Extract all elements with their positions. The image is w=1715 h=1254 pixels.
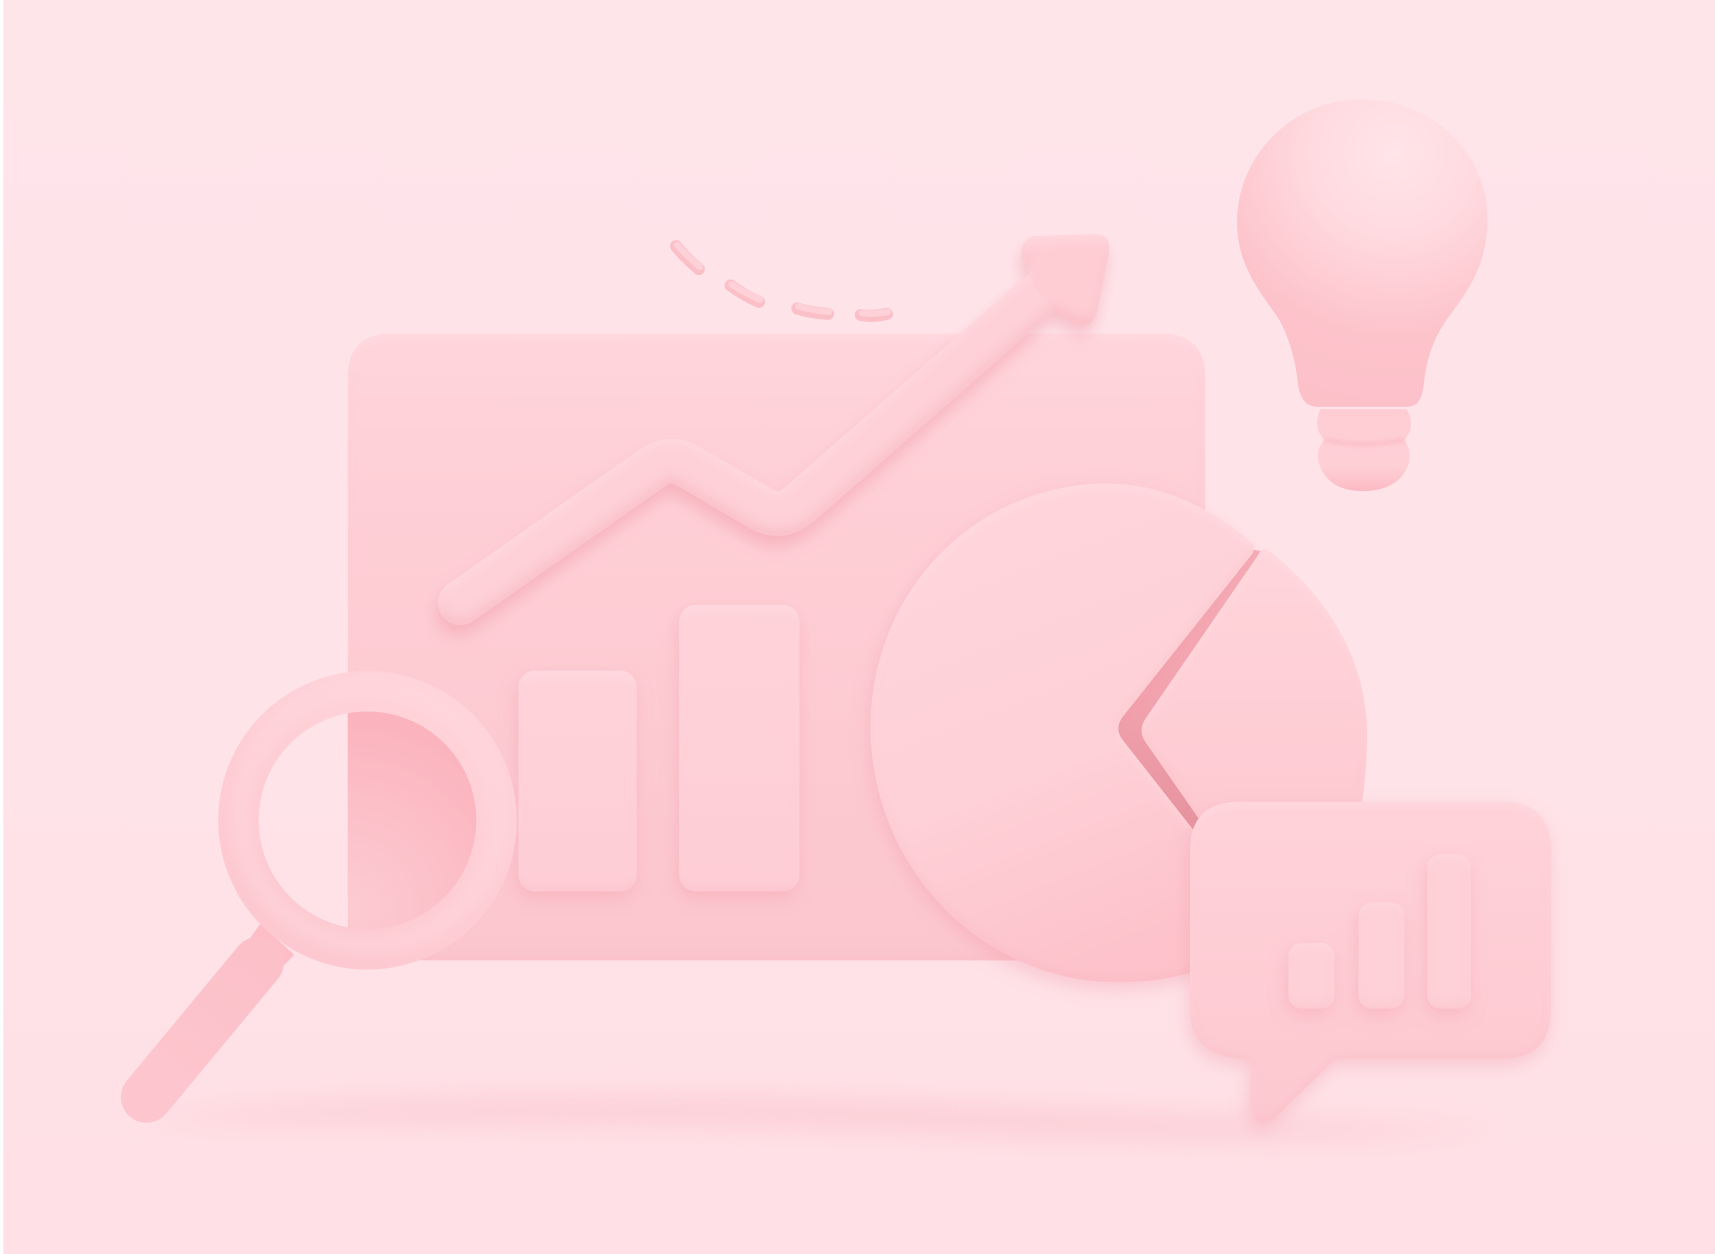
floor shadow — [131, 1098, 1509, 1139]
bulb base — [1317, 409, 1411, 491]
chart line with arrow — [460, 234, 1109, 603]
magnifying glass — [147, 656, 525, 1097]
mini bars — [1288, 854, 1471, 1008]
bulb glass — [1237, 99, 1488, 407]
pie gap — [1105, 547, 1269, 842]
pie main body — [871, 483, 1253, 982]
speech bubble with mini bars — [1190, 802, 1551, 1123]
bar chart: large bars — [518, 605, 800, 891]
pie slice — [1142, 549, 1367, 831]
handle neck — [253, 926, 292, 964]
bubble body — [1190, 802, 1551, 1123]
base groove — [1325, 440, 1404, 444]
dashed trajectory — [676, 245, 888, 316]
handle — [147, 963, 258, 1097]
ring — [238, 687, 499, 949]
pie chart — [871, 483, 1367, 982]
lens tint — [348, 712, 476, 895]
light bulb — [1237, 99, 1488, 491]
panel: chart board — [348, 334, 1205, 960]
